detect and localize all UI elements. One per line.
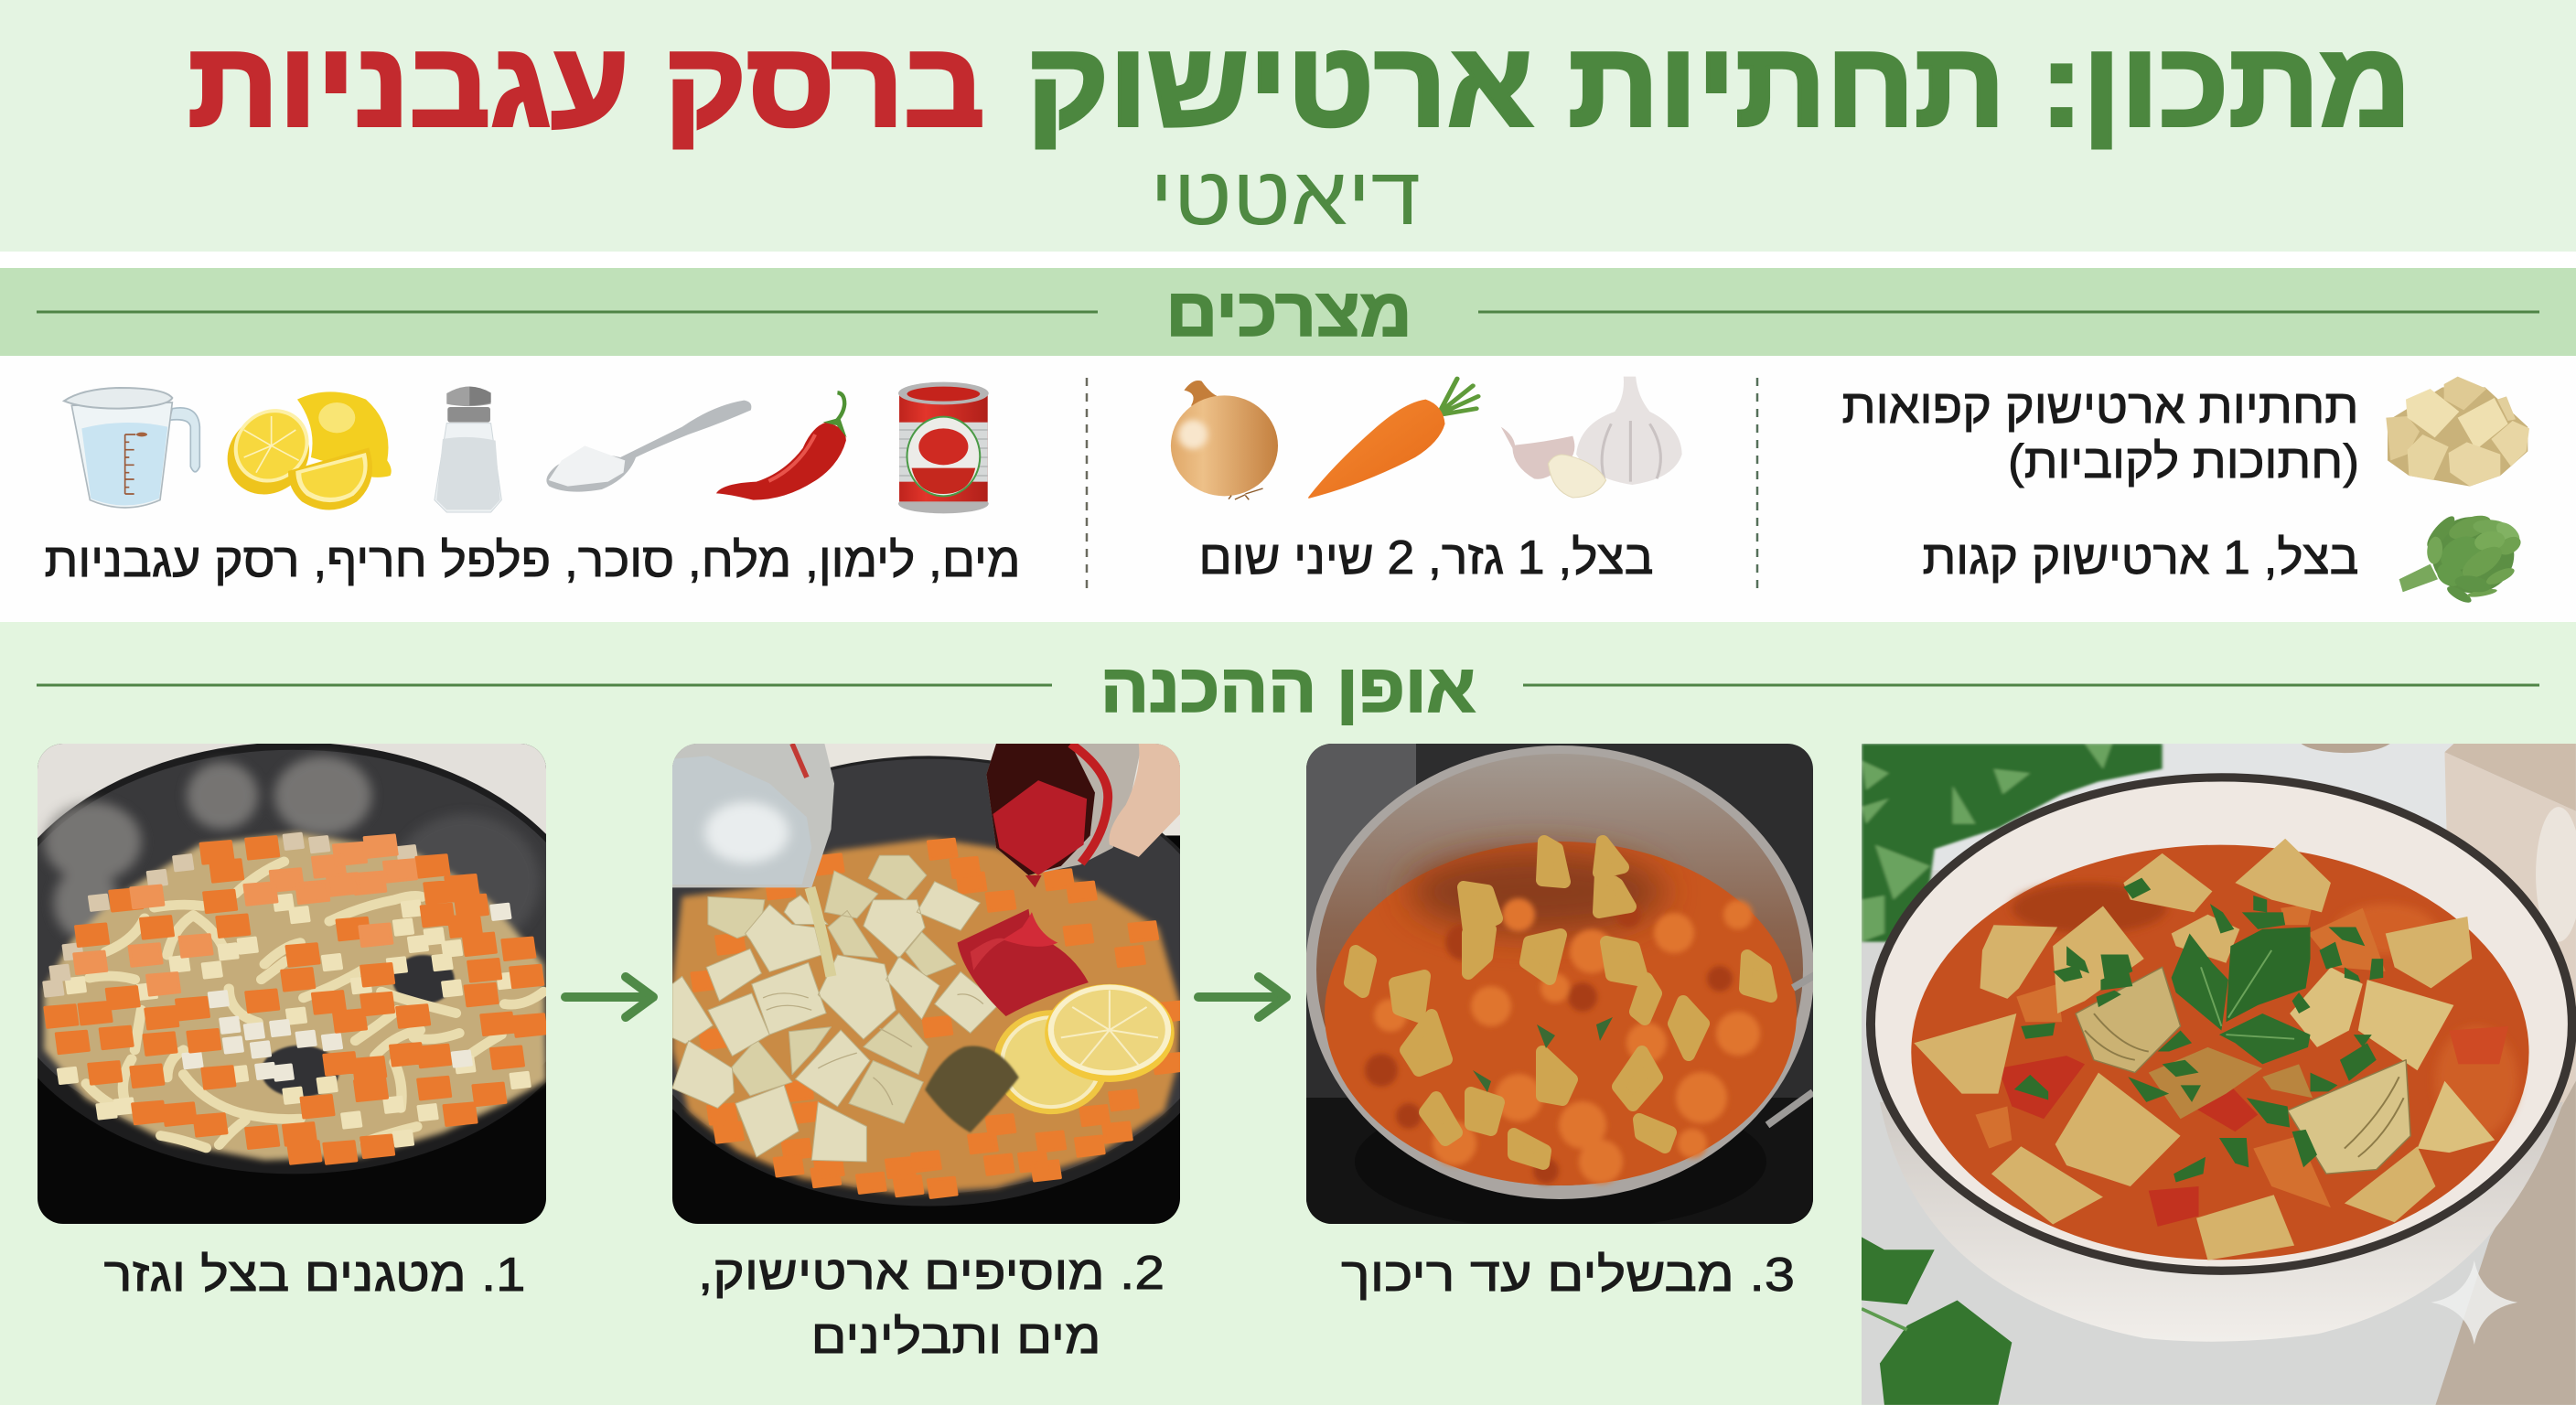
artichoke chunks <box>1914 839 2495 1260</box>
photo: finished dish <box>1862 744 2576 1405</box>
pot handle <box>1767 975 1815 1125</box>
icon: measuring jug <box>64 388 199 508</box>
icon: carrot <box>1308 379 1478 499</box>
hand <box>1109 744 1180 857</box>
text: onion and artichoke: בצל, 1 ארטישוק קגות <box>1923 531 2358 585</box>
sparkle watermark <box>2431 1260 2517 1345</box>
header band <box>0 0 2576 252</box>
tomato can <box>986 744 1142 887</box>
arrow: step 1 to step 2 <box>565 977 653 1017</box>
step 2 caption line 1: 2. מוסיפים ארטישוק, <box>698 1247 1165 1300</box>
water jug <box>672 744 834 976</box>
bowl rim and inside <box>1871 778 2572 1271</box>
heading: ingredients: מצרכים <box>1165 274 1412 350</box>
icon: lemons <box>211 391 392 511</box>
panel: ingredients <box>0 356 2576 622</box>
icon: spoon of sugar <box>546 401 751 492</box>
white separator <box>0 252 2576 268</box>
steam <box>44 756 371 939</box>
subtitle: דיאטטי <box>1150 151 1421 242</box>
lemon slices <box>993 984 1175 1114</box>
icon: fresh artichoke <box>2399 510 2524 606</box>
title <box>188 17 2411 151</box>
text: spices: מים, לימון, מלח, סוכר, פלפל חריף, רסק עגבניות <box>44 534 1021 587</box>
spices pile <box>925 1046 1019 1132</box>
arrow: step 2 to step 3 <box>1198 977 1286 1017</box>
artichoke cubes <box>672 855 1000 1162</box>
icon: artichoke cubes <box>2386 377 2529 487</box>
icon: salt shaker <box>435 386 501 512</box>
bowl body <box>1880 1102 2563 1342</box>
parsley bottom left <box>1862 1237 2012 1405</box>
photo: step 1 sauteing onion and carrot <box>38 744 546 1224</box>
parsley top left <box>1862 744 2163 942</box>
title: מתכון: תחתיות ארטישוק <box>1026 17 2411 151</box>
icon: onion <box>1171 381 1278 499</box>
icon: garlic <box>1501 377 1682 498</box>
text: vegetables: בצל, 1 גזר, 2 שיני שום <box>1198 531 1654 585</box>
icon: chili pepper <box>716 392 847 500</box>
title: ברסק עגבניות <box>188 17 984 151</box>
ingredients heading band <box>0 268 2576 356</box>
photo: step 2 adding artichoke, water and spices <box>672 744 1180 1224</box>
step 3 caption: 3. מבשלים עד ריכוך <box>1341 1249 1795 1302</box>
step 2 caption line 2: מים ותבלינים <box>810 1311 1101 1364</box>
red tomato chunks <box>1998 1026 2508 1227</box>
parsley sprig <box>2172 928 2311 1064</box>
photo: step 3 simmering pot <box>1305 744 1815 1230</box>
parsley flecks <box>2014 878 2383 1182</box>
spoon in background <box>2302 744 2390 753</box>
napkin <box>2435 744 2576 1405</box>
text: frozen artichoke bottoms line 2: (חתוכות לקוביות) <box>2008 435 2359 488</box>
stew <box>1911 845 2529 1260</box>
heading: preparation: אופן ההכנה <box>1100 650 1476 726</box>
step 1 caption: 1. מטגנים בצל וגזר <box>104 1249 525 1302</box>
text: frozen artichoke bottoms line 1: תחתיות ארטישוק קפואות <box>1842 381 2358 434</box>
icon: tomato paste can <box>898 382 989 513</box>
tomato paste mound <box>958 909 1089 1016</box>
